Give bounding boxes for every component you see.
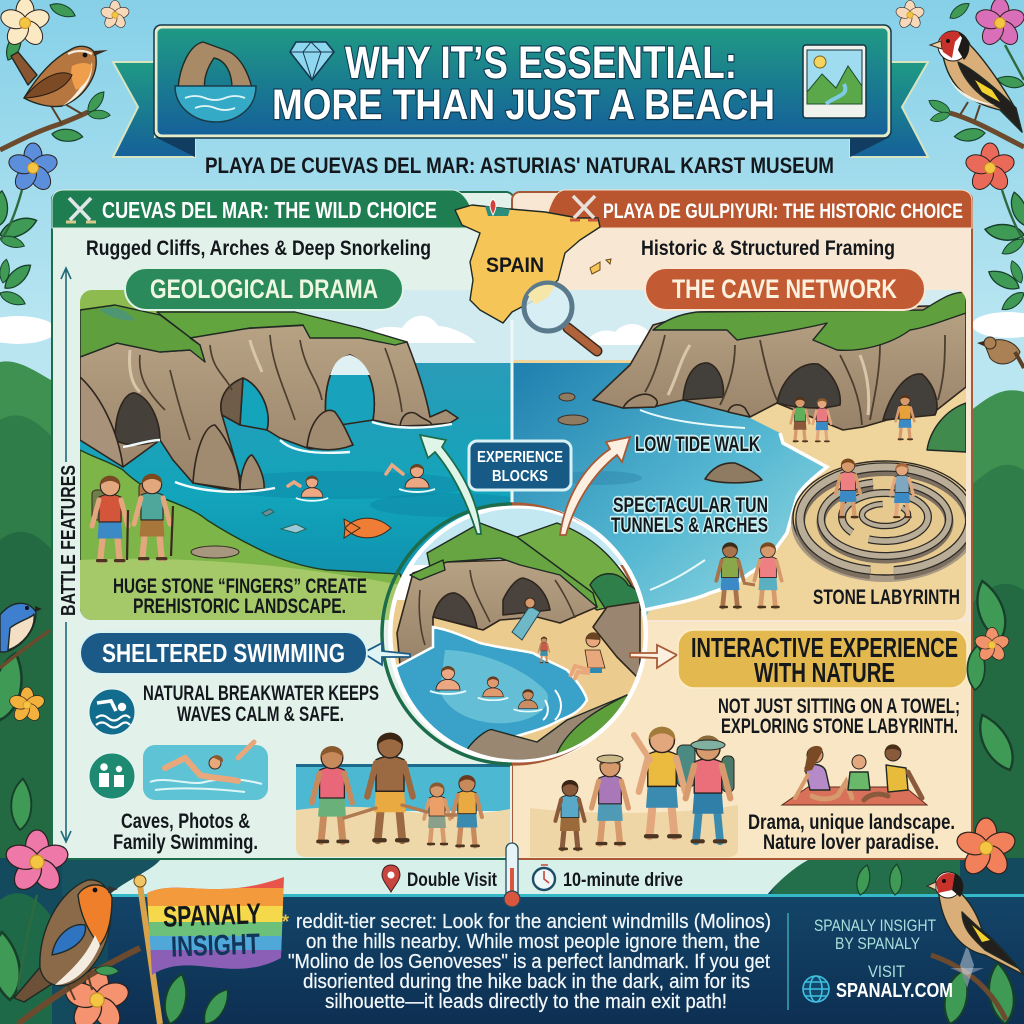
secret tip text: disoriented during the hike back in the dark, aim for its — [303, 971, 750, 993]
experience blocks label: EXPERIENCE — [477, 449, 563, 466]
battle features side label: BATTLE FEATURES — [58, 465, 80, 616]
rainbow flag: SPANALY — [163, 898, 262, 934]
map of Spain — [455, 199, 611, 323]
arrow: right to interactive experience — [630, 645, 677, 668]
caption: tunnels and arches — [611, 494, 768, 537]
right panel: Playa de Gulpiyuri — [512, 190, 972, 859]
center circle scene — [382, 504, 650, 770]
cave beach people — [430, 598, 605, 712]
brand block — [803, 916, 953, 1002]
text: drama, unique landscape: Drama, unique landscape. — [748, 811, 955, 834]
brand block: SPANALY INSIGHT — [814, 916, 936, 935]
swimmer card — [143, 742, 268, 800]
text: drama, unique landscape: Nature lover paradise. — [763, 831, 939, 854]
brand block: VISIT — [868, 962, 905, 981]
caption: stone fingers: HUGE STONE “FINGERS” CREATE — [113, 575, 367, 598]
distance strip — [382, 865, 683, 892]
center divider — [510, 320, 514, 510]
pill: the cave network: THE CAVE NETWORK — [672, 274, 897, 304]
towel group — [782, 744, 927, 805]
icon: stopwatch — [533, 865, 555, 890]
left panel: Cuevas del Mar — [52, 190, 514, 859]
title banner ribbon — [113, 25, 928, 157]
caption: low tide walk: LOW TIDE WALK — [635, 433, 760, 456]
hikers — [92, 474, 173, 561]
text: caves, photos — [113, 810, 258, 854]
walking couple — [716, 542, 782, 607]
rainbow flag: INSIGHT — [171, 928, 261, 964]
right lower area — [513, 622, 971, 858]
left subheading: Rugged Cliffs, Arches & Deep Snorkeling — [86, 237, 431, 260]
text: caves, photos: Caves, Photos & — [121, 810, 250, 833]
experience blocks label: BLOCKS — [492, 468, 548, 485]
fish — [262, 509, 391, 538]
icon: landscape photo — [803, 45, 866, 118]
family on beach — [296, 733, 510, 857]
pill: geological drama: GEOLOGICAL DRAMA — [150, 274, 378, 304]
text: natural breakwater: WAVES CALM & SAFE. — [177, 703, 344, 726]
bird: wren top left — [0, 46, 111, 150]
distance strip: Double Visit — [407, 870, 498, 891]
crossed swords icon — [570, 196, 598, 220]
secret tip text: * — [282, 912, 290, 933]
text: natural breakwater: NATURAL BREAKWATER KEEPS — [143, 682, 379, 705]
thermometer — [504, 843, 520, 907]
cave rock wall — [593, 305, 966, 430]
cliff-top grass — [80, 305, 205, 362]
green hillside — [80, 450, 420, 625]
text: drama, unique landscape — [748, 811, 955, 854]
map of Spain: SPAIN — [486, 254, 544, 277]
swim icon — [89, 689, 135, 735]
pill: interactive experience: WITH NATURE — [754, 657, 895, 688]
left header band — [52, 190, 478, 228]
stone labyrinth — [791, 461, 979, 582]
caption: stone fingers — [113, 575, 367, 618]
title text: MORE THAN JUST A BEACH — [272, 81, 775, 129]
pill: sheltered swimming: SHELTERED SWIMMING — [102, 638, 345, 668]
bird: goldfinch top right — [927, 31, 1024, 147]
arrow: up-right to cave network — [560, 437, 630, 535]
bird: robin bottom left — [14, 880, 140, 1024]
cliff-top grass — [653, 292, 966, 350]
secret tip text — [282, 911, 771, 1013]
pill: interactive experience — [678, 630, 967, 688]
arrow: left to sheltered swimming — [363, 643, 410, 665]
bottom insight band — [52, 894, 1024, 1024]
right header band — [544, 190, 972, 228]
text: not just sitting — [718, 695, 960, 738]
pill: sheltered swimming — [80, 632, 367, 674]
icon: globe — [803, 976, 829, 1002]
left heading text: CUEVAS DEL MAR: THE WILD CHOICE — [102, 197, 437, 223]
right heading text — [570, 196, 963, 223]
right scene: sea, beach and caves — [512, 290, 979, 625]
left scene: cliffs and sea — [80, 290, 530, 625]
magnifying glass — [524, 283, 597, 351]
secret tip text: "Molino de los Genoveses" is a perfect landmark. If you get — [288, 951, 770, 973]
bird: bluebird left — [0, 603, 50, 668]
pill: the cave network — [645, 268, 925, 310]
brand block: SPANALY.COM — [836, 980, 953, 1002]
rock arches — [80, 325, 458, 492]
experience blocks label — [469, 441, 571, 490]
arrow: up-left to geological drama — [420, 435, 481, 534]
shore foam — [123, 422, 452, 492]
secret tip text: on the hills nearby. While most people ignore them, the — [306, 931, 760, 953]
caption: tunnels and arches: SPECTACULAR TUN — [613, 494, 768, 517]
family icon — [89, 753, 135, 799]
swimmers — [288, 464, 435, 501]
text: natural breakwater — [143, 682, 379, 726]
rainbow flag — [134, 870, 290, 1024]
icon: rock arch — [175, 42, 256, 122]
battle features side label — [58, 268, 80, 842]
brand block: BY SPANALY — [835, 934, 920, 953]
cave visitors — [791, 395, 914, 441]
caption: tunnels and arches: TUNNELS & ARCHES — [611, 514, 768, 537]
crossed swords icon — [66, 198, 96, 222]
cove water — [396, 626, 588, 749]
bird: goldfinch bottom right — [927, 872, 1024, 1020]
bird: small brown bird right — [977, 337, 1024, 368]
caption: stone fingers: PREHISTORIC LANDSCAPE. — [133, 595, 346, 618]
icon: diamond — [290, 42, 334, 80]
caption: stone labyrinth: STONE LABYRINTH — [813, 586, 960, 609]
title text: WHY IT’S ESSENTIAL: — [345, 37, 737, 88]
distance strip: 10-minute drive — [563, 870, 683, 891]
right subheading: Historic & Structured Framing — [641, 237, 895, 260]
text: caves, photos: Family Swimming. — [113, 831, 258, 854]
secret tip text: silhouette—it leads directly to the main exit path! — [325, 991, 727, 1013]
secret tip text: reddit-tier secret: Look for the ancient windmills (Molinos) — [296, 911, 771, 933]
icon: map pin — [382, 865, 400, 892]
left lower area — [53, 622, 512, 858]
family exploring — [555, 727, 734, 849]
title text — [272, 37, 775, 129]
pill: geological drama — [125, 268, 403, 310]
subtitle: PLAYA DE CUEVAS DEL MAR: ASTURIAS' NATURAL KARST MUSEUM — [205, 153, 834, 178]
